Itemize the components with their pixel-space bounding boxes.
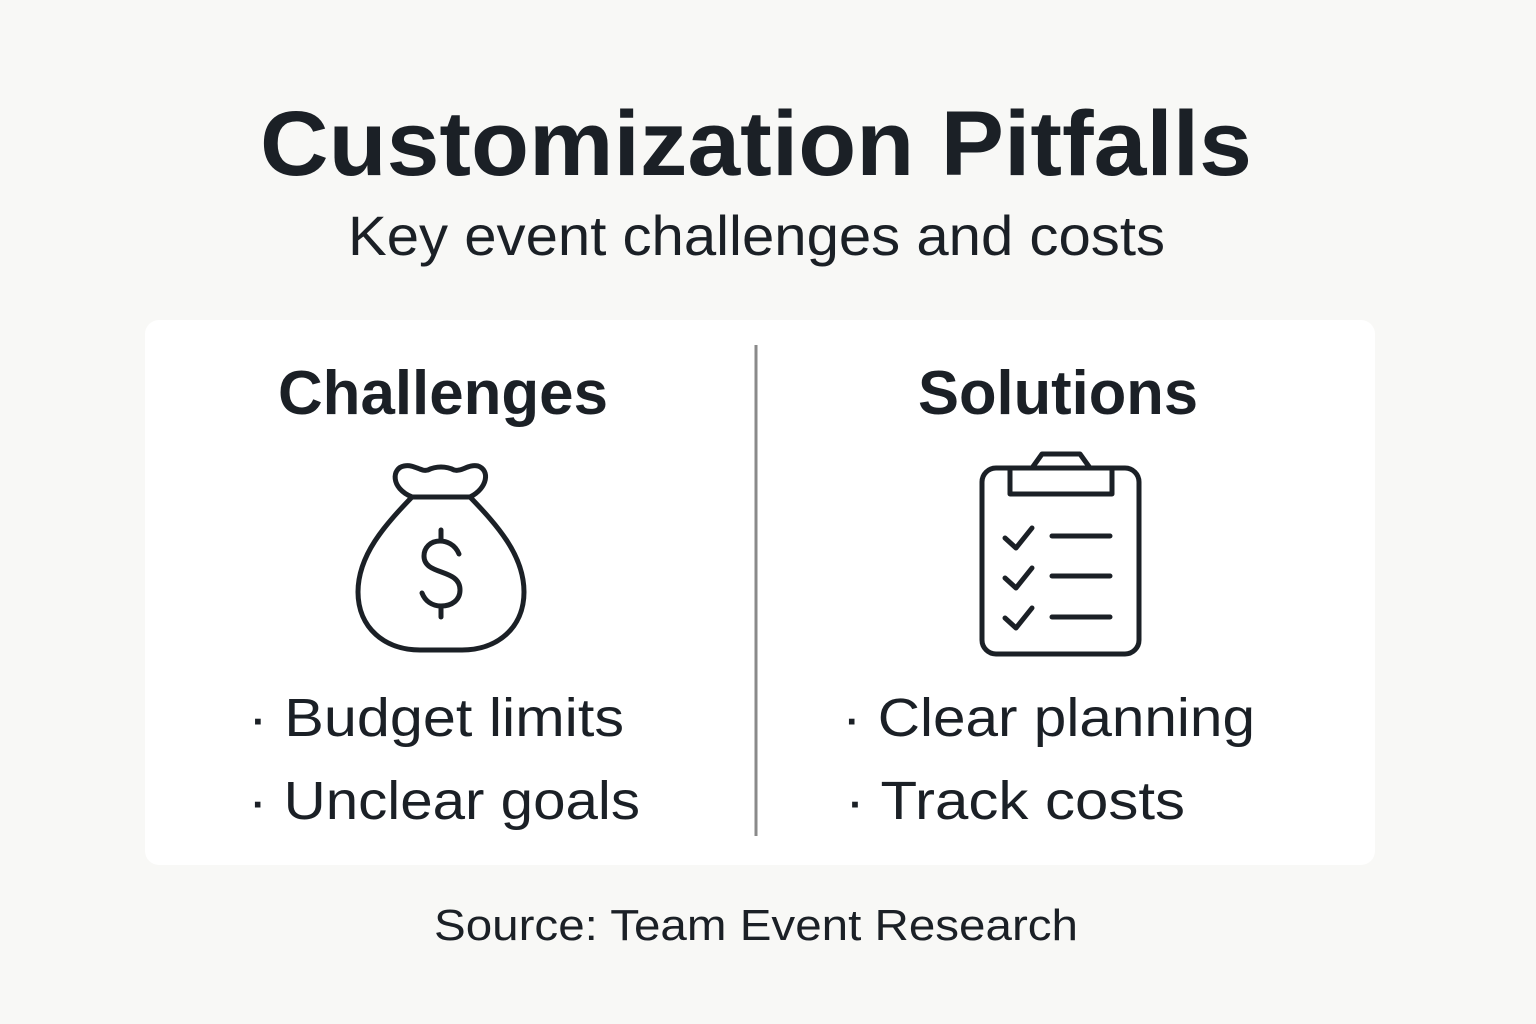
icon: clipboard checklist <box>982 454 1139 654</box>
list: solutions: · Clear planning <box>842 688 1255 748</box>
title: Customization Pitfalls <box>260 93 1252 195</box>
source note: Source: Team Event Research <box>434 901 1078 950</box>
icon: money bag <box>358 466 524 650</box>
list: solutions <box>842 688 1255 831</box>
heading: solutions: Solutions <box>918 359 1198 428</box>
list: challenges: · Unclear goals <box>248 771 640 831</box>
list: challenges <box>248 688 640 831</box>
panel: main card <box>145 320 1375 865</box>
heading: challenges: Challenges <box>278 359 608 428</box>
subtitle: Key event challenges and costs <box>348 204 1165 267</box>
list: solutions: · Track costs <box>845 771 1185 831</box>
list: challenges: · Budget limits <box>248 688 624 748</box>
